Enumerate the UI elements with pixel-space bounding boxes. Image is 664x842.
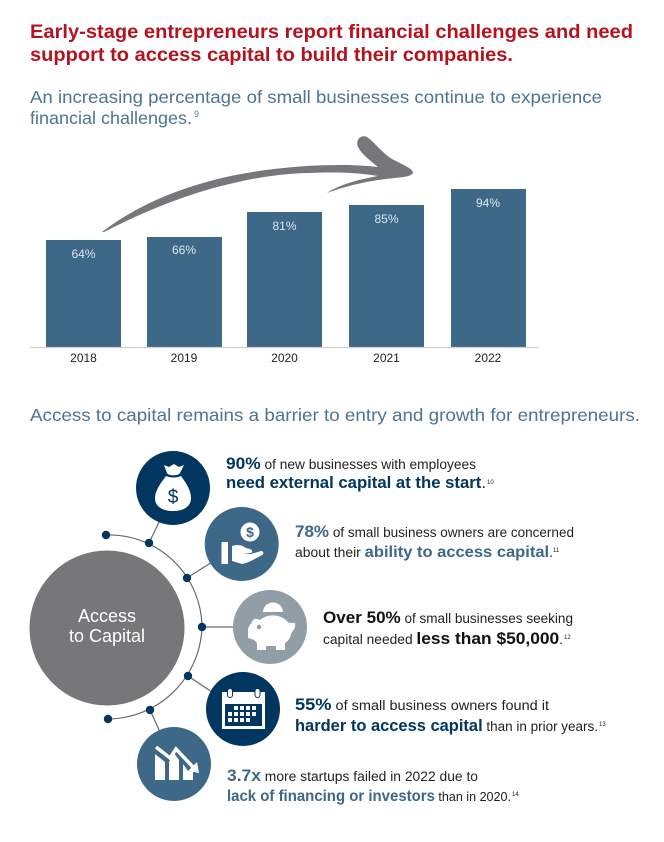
subtitle: financial challenges: An increasing percentage of small businesses continue to experience bbox=[30, 87, 602, 107]
icon: declining chart bbox=[137, 727, 211, 801]
central circle: Access to Capital: to Capital bbox=[69, 626, 145, 646]
callout: over 50% needed less than $50,000 bbox=[323, 608, 573, 648]
callout: 90% need external capital: 90% of new businesses with employees bbox=[226, 454, 476, 473]
bar 2021 bbox=[349, 205, 424, 365]
title: Early-stage entrepreneurs report financial challenges and need bbox=[30, 21, 633, 43]
callout: 3.7x more startups failed bbox=[227, 766, 519, 805]
bar 2021: 2021 bbox=[373, 351, 400, 365]
bar 2019: 66% bbox=[172, 243, 196, 257]
icon: piggy bank bbox=[233, 590, 307, 664]
bar 2020: 81% bbox=[272, 219, 297, 233]
callout: 78% concerned about access: 78% of small business owners are concerned bbox=[295, 522, 574, 541]
bar 2022: 2022 bbox=[475, 351, 502, 365]
title: support to access capital to build their companies. bbox=[30, 44, 513, 66]
icon: hand holding coin bbox=[205, 507, 279, 581]
icon: calendar bbox=[206, 672, 280, 746]
bar 2018 bbox=[46, 240, 121, 365]
callout: 3.7x more startups failed: lack of financing or investors than in 2020. bbox=[227, 788, 511, 805]
bar 2018: 64% bbox=[71, 247, 96, 261]
callout: over 50% needed less than $50,000: Over 50% of small businesses seeking bbox=[323, 608, 573, 627]
callout: 55% harder to access capital: harder to access capital than in prior years. bbox=[295, 717, 598, 735]
callout: 78% concerned about access: 11 bbox=[553, 548, 560, 554]
icon: hand holding coin: $ bbox=[246, 524, 254, 540]
bar 2021: 85% bbox=[374, 212, 399, 226]
bar 2020: 2020 bbox=[271, 351, 298, 365]
bar 2022: 94% bbox=[476, 196, 500, 210]
callout: 90% need external capital: need external capital at the start. bbox=[226, 474, 486, 492]
title bbox=[30, 21, 633, 66]
bar chart: small businesses experiencing financial challenges bbox=[30, 189, 539, 365]
callout: over 50% needed less than $50,000: capital needed less than $50,000. bbox=[323, 629, 563, 648]
callout: 3.7x more startups failed: 3.7x more startups failed in 2022 due to bbox=[227, 766, 478, 785]
callout: 55% harder to access capital bbox=[295, 695, 606, 735]
bar 2020 bbox=[247, 212, 322, 365]
callout: 55% harder to access capital: 55% of small business owners found it bbox=[295, 695, 549, 714]
icon: money bag bbox=[136, 451, 210, 525]
icon: money bag: $ bbox=[168, 487, 179, 508]
callout: 90% need external capital: 10 bbox=[487, 480, 494, 486]
callout: 55% harder to access capital: 13 bbox=[599, 722, 606, 728]
connector arc and nodes bbox=[102, 520, 236, 732]
arrow: upward trend bbox=[102, 136, 413, 232]
subtitle: financial challenges: 9 bbox=[194, 109, 199, 119]
bar 2019: 2019 bbox=[171, 351, 198, 365]
central circle: Access to Capital bbox=[30, 550, 184, 706]
heading: access to capital: Access to capital remains a barrier to entry and growth for entrepreneurs. bbox=[30, 405, 640, 425]
central circle: Access to Capital: Access bbox=[78, 606, 136, 626]
callout: over 50% needed less than $50,000: 12 bbox=[564, 635, 571, 641]
bar 2018: 2018 bbox=[70, 351, 97, 365]
callout: 78% concerned about access bbox=[295, 522, 574, 561]
bar 2022 bbox=[451, 189, 526, 365]
subtitle: financial challenges: financial challenges. bbox=[30, 108, 192, 128]
callout: 78% concerned about access: about their ability to access capital . bbox=[295, 544, 553, 561]
bar 2019 bbox=[147, 237, 222, 365]
subtitle: financial challenges bbox=[30, 87, 602, 128]
callout: 90% need external capital bbox=[226, 454, 494, 492]
callout: 3.7x more startups failed: 14 bbox=[512, 792, 519, 798]
